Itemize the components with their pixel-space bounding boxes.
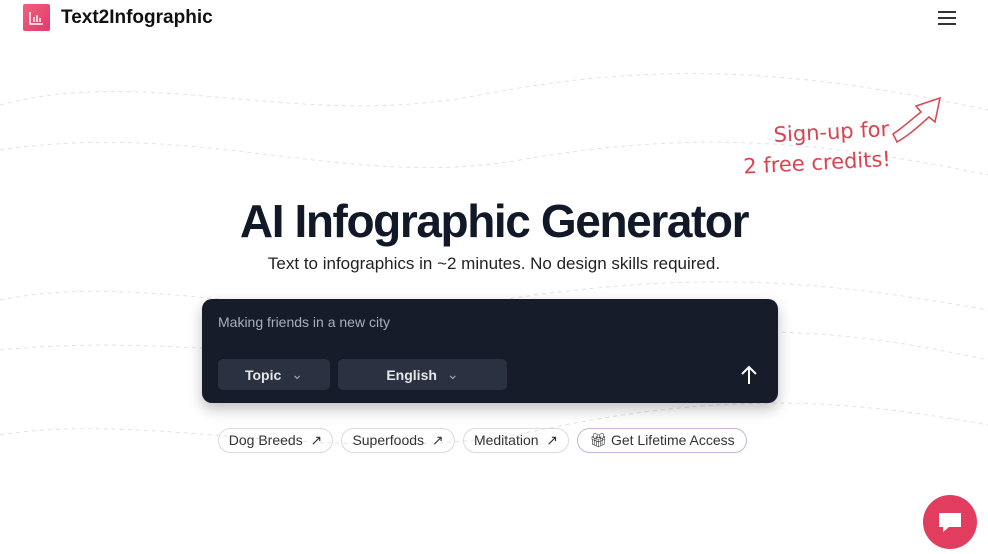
chip: lifetime access: 🎁︎ Get Lifetime Access xyxy=(589,432,735,448)
callout: sign-up: Sign-up for xyxy=(773,117,890,147)
chip: meditation xyxy=(463,428,569,453)
callout: sign-up xyxy=(743,96,941,179)
callout: sign-up: 2 free credits! xyxy=(743,147,891,179)
dropdown: language: ⌄ xyxy=(447,366,459,382)
dropdown: topic: ⌄ xyxy=(291,366,303,382)
chip: dog breeds xyxy=(218,428,333,453)
chip: meditation: Meditation ↗ xyxy=(474,432,558,448)
title: AI Infographic Generator xyxy=(240,195,748,247)
input panel xyxy=(202,299,778,403)
subtitle: Text to infographics in ~2 minutes. No design skills required. xyxy=(268,254,720,273)
placeholder: Making friends in a new city xyxy=(218,314,390,330)
arrow xyxy=(892,96,941,143)
chip: dog breeds: Dog Breeds ↗ xyxy=(229,432,322,448)
icon: submit arrow xyxy=(741,366,757,384)
dropdown: topic xyxy=(218,359,330,390)
icon: menu xyxy=(938,11,956,25)
dropdown: language: English xyxy=(386,366,437,382)
chip: lifetime access xyxy=(577,428,747,453)
dropdown: language xyxy=(338,359,507,390)
icon: chat button xyxy=(923,495,977,549)
dropdown: topic: Topic xyxy=(245,366,281,382)
logo xyxy=(23,4,213,31)
brand name: Text2Infographic xyxy=(61,7,213,28)
chip: superfoods: Superfoods ↗ xyxy=(352,432,444,448)
chip: superfoods xyxy=(341,428,455,453)
icon: logo chart xyxy=(23,4,50,31)
